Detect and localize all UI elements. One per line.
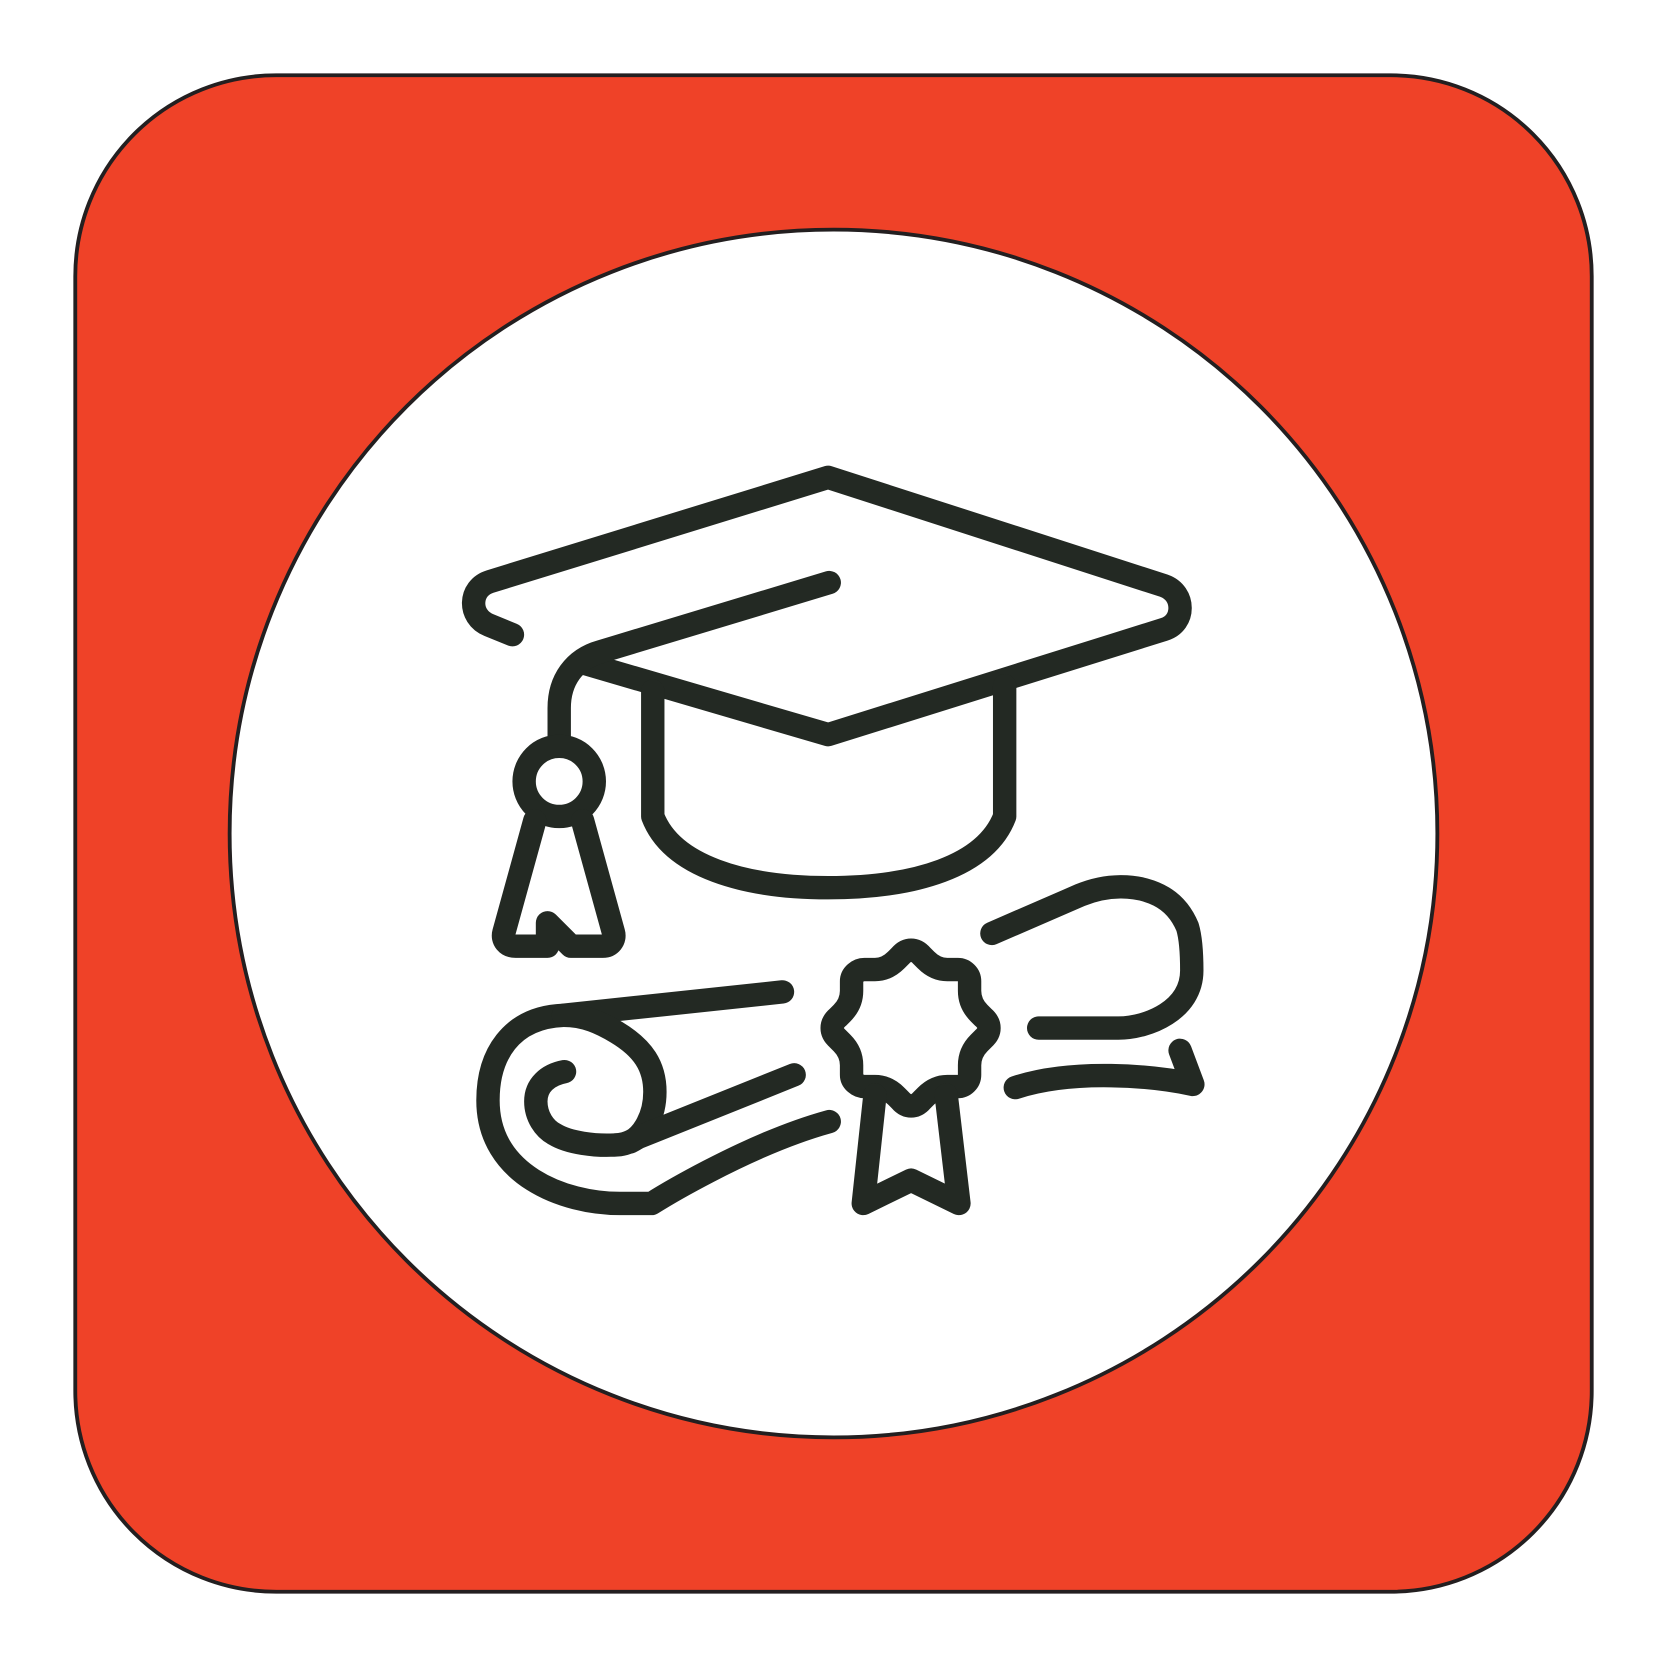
icon: tassel [503, 583, 829, 946]
icon: graduation cap and diploma [474, 477, 1193, 1203]
icon: rolled diploma scroll [488, 992, 829, 1203]
icon: mortarboard cap [474, 477, 1180, 888]
panel: white circle [230, 230, 1437, 1437]
icon: unrolled diploma right end [992, 887, 1193, 1088]
icon: award rosette [832, 950, 989, 1203]
